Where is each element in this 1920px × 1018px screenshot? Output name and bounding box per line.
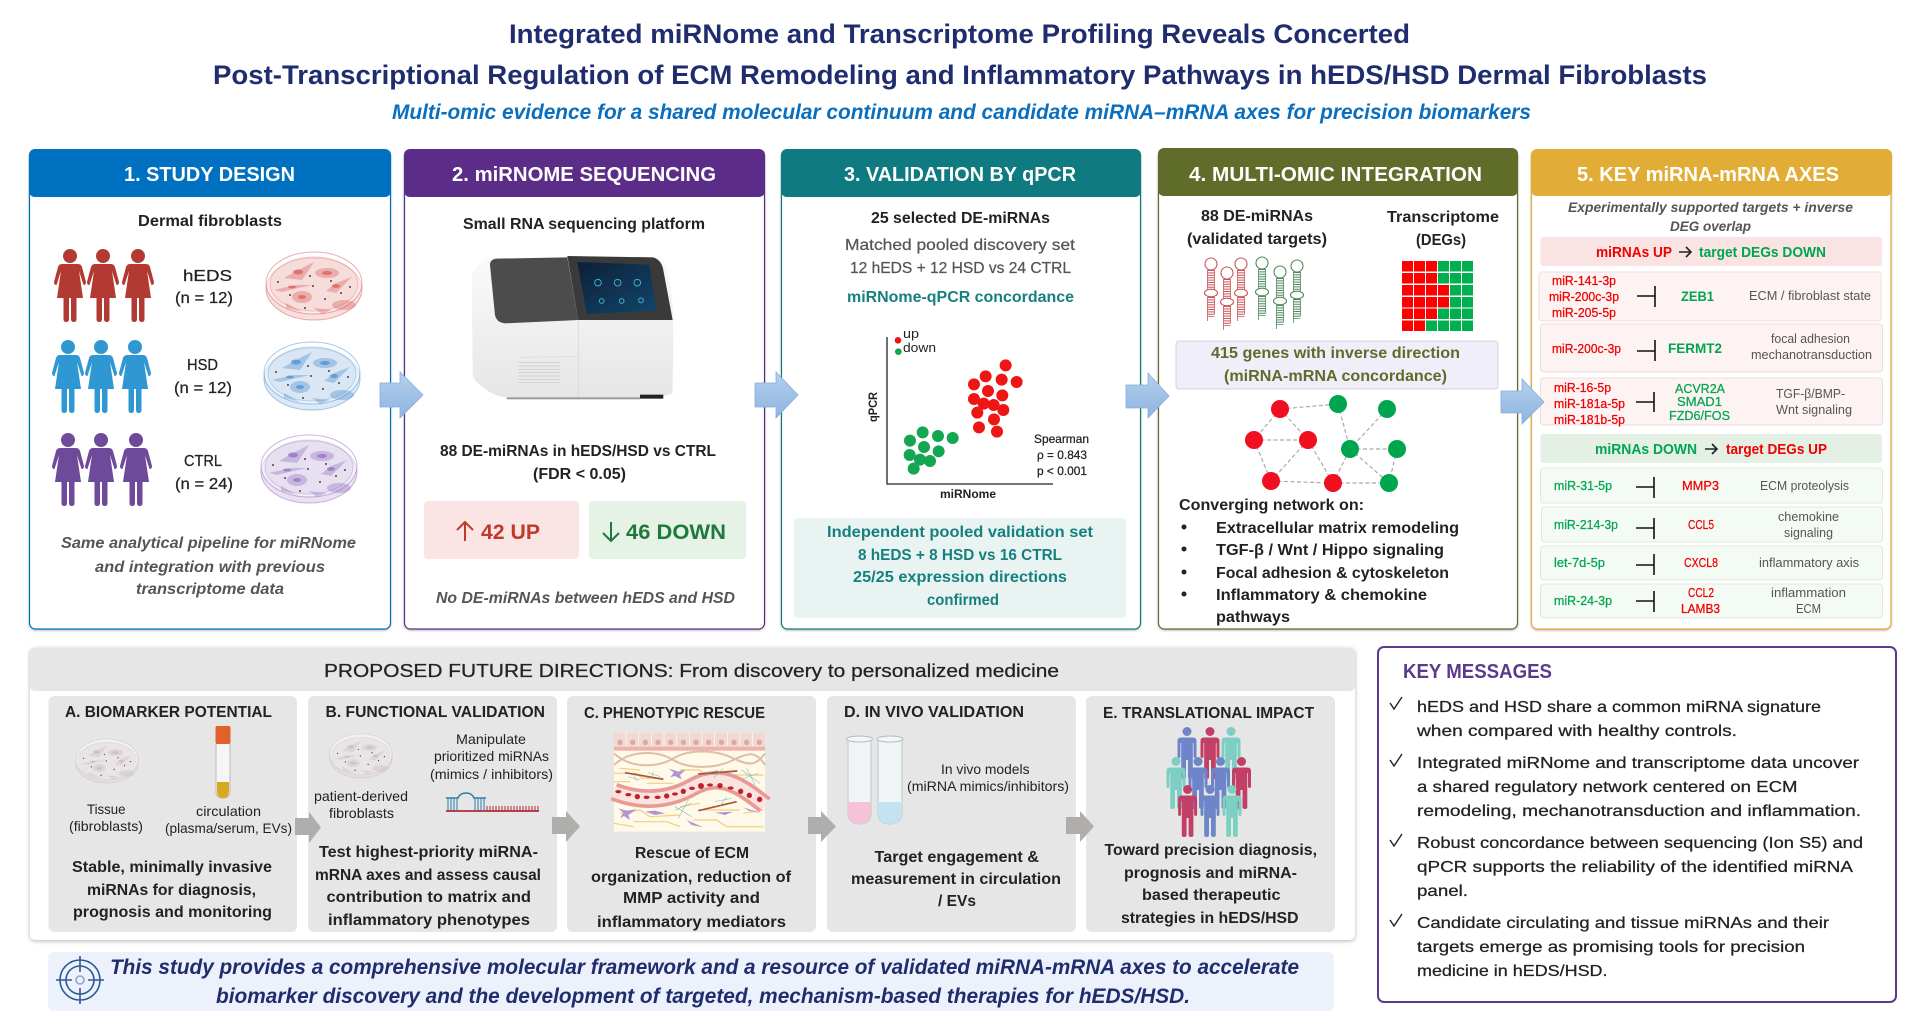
heading: key messages: KEY MESSAGES xyxy=(1403,661,1552,683)
icon: sequencer xyxy=(472,256,673,399)
callout: independent validation: 8 hEDS + 8 HSD vs 16 CTRL xyxy=(858,547,1062,564)
panel: validation by qPCR: 25 selected DE-miRNAs xyxy=(871,210,1050,227)
panel: multi-omic integration xyxy=(1158,148,1518,629)
panel: miRNome sequencing: Small RNA sequencing platform xyxy=(463,216,705,233)
icon: tissue dish xyxy=(76,739,138,783)
panel: multi-omic integration: 4. MULTI-OMIC INTEGRATION xyxy=(1189,164,1482,186)
icon: blood tube xyxy=(216,726,230,798)
icon: fibroblast dish xyxy=(330,734,392,778)
band: miRNAs up: miRNAs UP xyxy=(1596,244,1672,261)
axis: MMP3 xyxy=(1540,468,1882,503)
card: phenotypic rescue: Rescue of ECM xyxy=(635,845,749,862)
callout: 46 down xyxy=(589,501,746,559)
panel: future directions: PROPOSED FUTURE DIRECTIONS: From discovery to personalized medicine xyxy=(324,661,1059,681)
axis: CCL2 LAMB3: CCL2 xyxy=(1688,585,1714,600)
title: Post-Transcriptional Regulation of ECM Remodeling and Inflammatory Pathways in hEDS/HSD Dermal Fibroblasts xyxy=(213,60,1707,90)
card: phenotypic rescue: organization, reduction of xyxy=(591,869,792,886)
card: functional validation: fibroblasts xyxy=(329,805,394,821)
axis: ZEB1: ECM / fibroblast state xyxy=(1749,288,1871,303)
card: functional validation xyxy=(308,696,557,932)
card: functional validation: prioritized miRNAs xyxy=(434,748,549,764)
label: transcriptome: (DEGs) xyxy=(1416,232,1466,249)
icon: hEDS women xyxy=(54,249,154,322)
axis: ZEB1: miR-141-3p xyxy=(1552,273,1616,288)
text: DE-miRNA count xyxy=(440,443,716,483)
panel: key miRNA-mRNA axes: 5. KEY miRNA-mRNA AXES xyxy=(1577,164,1839,186)
panel: study design: Dermal fibroblasts xyxy=(138,213,282,230)
message 1: hEDS and HSD share a common miRNA signature xyxy=(1417,699,1821,716)
panel: validation by qPCR: miRNome-qPCR concordance xyxy=(847,289,1074,306)
icon: miRNA hairpins xyxy=(1204,257,1304,330)
axis: CCL2 LAMB3: miR-24-3p xyxy=(1554,593,1612,608)
message 4: targets emerge as promising tools for precision xyxy=(1417,939,1805,956)
arrow: C to D xyxy=(808,811,836,842)
subtitle: Multi-omic evidence for a shared molecular continuum and candidate miRNA–mRNA axes for precision biomarkers xyxy=(392,101,1531,124)
card: biomarker potential: Stable, minimally invasive xyxy=(72,859,272,876)
list: converging network: Focal adhesion & cytoskeleton xyxy=(1216,565,1449,582)
card: biomarker potential: prognosis and monitoring xyxy=(73,904,272,921)
icon: CTRL women xyxy=(52,433,152,506)
band: miRNAs up xyxy=(1540,237,1882,266)
label: DE-miRNAs xyxy=(1187,208,1327,248)
arrow: validation to integration xyxy=(1126,373,1169,418)
axis: ZEB1 xyxy=(1539,272,1881,321)
arrow: B to C xyxy=(552,811,580,842)
list: converging network xyxy=(1179,497,1459,626)
axis: MMP3: miR-31-5p xyxy=(1554,478,1612,493)
text: DE-miRNA count: 88 DE-miRNAs in hEDS/HSD vs CTRL xyxy=(440,443,716,460)
axis: ZEB1: ZEB1 xyxy=(1681,288,1714,304)
axis: ACVR2A SMAD1 FZD6/FOS: TGF-β/BMP- xyxy=(1776,386,1845,401)
label: hEDS: hEDS xyxy=(183,268,232,285)
axis: CCL2 LAMB3: inflammation xyxy=(1771,585,1846,600)
band: miRNAs down xyxy=(1540,434,1882,463)
title: Integrated miRNome and Transcriptome Profiling Reveals Concerted xyxy=(509,19,1410,49)
axis: ACVR2A SMAD1 FZD6/FOS: ACVR2A xyxy=(1675,381,1725,396)
axis: ACVR2A SMAD1 FZD6/FOS: SMAD1 xyxy=(1677,394,1722,409)
message 1: when compared with healthy controls. xyxy=(1416,723,1737,740)
card: biomarker potential: A. BIOMARKER POTENTIAL xyxy=(65,704,272,721)
axis: FERMT2: mechanotransduction xyxy=(1751,347,1872,362)
label: DE-miRNAs: (validated targets) xyxy=(1187,231,1327,248)
scatter plot xyxy=(866,326,1089,501)
card: biomarker potential xyxy=(48,696,297,932)
card: phenotypic rescue: C. PHENOTYPIC RESCUE xyxy=(584,705,765,722)
card: functional validation: B. FUNCTIONAL VALIDATION xyxy=(326,704,545,721)
band: miRNAs down: miRNAs DOWN xyxy=(1595,441,1697,458)
note: no DE between groups: No DE-miRNAs between hEDS and HSD xyxy=(436,590,735,607)
card: biomarker potential: Tissue xyxy=(87,801,126,817)
axis: FERMT2: focal adhesion xyxy=(1771,331,1850,346)
card: in vivo validation: D. IN VIVO VALIDATION xyxy=(844,704,1024,721)
axis: CCL5: signaling xyxy=(1784,525,1833,540)
axis: CCL2 LAMB3: ECM xyxy=(1796,601,1821,616)
axis: CCL5: miR-214-3p xyxy=(1554,517,1618,532)
note: targets: Experimentally supported targets + inverse xyxy=(1568,199,1853,215)
arrow: D to E xyxy=(1066,811,1094,842)
axis: ACVR2A SMAD1 FZD6/FOS: miR-181a-5p xyxy=(1554,396,1625,411)
card: translational impact: E. TRANSLATIONAL IMPACT xyxy=(1103,705,1314,722)
banner: conclusion: This study provides a comprehensive molecular framework and a resource of validated miRNA-mRNA axes to accelerate xyxy=(110,956,1299,979)
panel: validation by qPCR: 12 hEDS + 12 HSD vs 24 CTRL xyxy=(850,260,1071,277)
note: pipeline: transcriptome data xyxy=(136,581,284,598)
icon: HSD women xyxy=(52,340,151,413)
card: biomarker potential: (plasma/serum, EVs) xyxy=(165,820,292,836)
arrow: sequencing to validation xyxy=(755,372,798,418)
label: HSD: HSD xyxy=(187,357,218,374)
icon: miRNA duplex xyxy=(446,793,539,811)
axis: ZEB1: miR-200c-3p xyxy=(1549,289,1619,304)
callout: independent validation: Independent pooled validation set xyxy=(827,524,1094,541)
card: functional validation: (mimics / inhibitors) xyxy=(430,766,553,782)
heatmap xyxy=(1402,261,1473,331)
icon: HSD dish xyxy=(264,342,360,410)
callout: 415 genes xyxy=(1176,341,1498,389)
axis: CXCL8: inflammatory axis xyxy=(1759,555,1859,570)
message 2 xyxy=(1417,755,1861,820)
label: CTRL: CTRL xyxy=(184,453,222,470)
card: functional validation: Test highest-priority miRNA- xyxy=(319,844,538,861)
note: targets xyxy=(1568,199,1853,234)
label: hEDS xyxy=(175,268,233,307)
axis: FERMT2: miR-200c-3p xyxy=(1552,341,1621,356)
panel: study design: 1. STUDY DESIGN xyxy=(124,164,295,186)
card: phenotypic rescue: MMP activity and xyxy=(623,890,760,907)
icon: check marks xyxy=(1390,697,1402,926)
axis: ZEB1: miR-205-5p xyxy=(1552,305,1616,320)
panel: miRNome sequencing xyxy=(404,149,765,629)
card: in vivo validation xyxy=(827,696,1076,932)
message 1 xyxy=(1416,699,1821,740)
message 4: Candidate circulating and tissue miRNAs and their xyxy=(1417,915,1830,932)
callout: 415 genes: (miRNA-mRNA concordance) xyxy=(1224,368,1447,385)
network diagram xyxy=(1245,395,1406,492)
list: converging network: Inflammatory & chemokine xyxy=(1216,587,1427,604)
card: functional validation: patient-derived xyxy=(314,788,408,804)
icon: test tubes xyxy=(846,736,903,824)
label: DE-miRNAs: 88 DE-miRNAs xyxy=(1201,208,1313,225)
axis: MMP3: ECM proteolysis xyxy=(1760,478,1849,493)
note: targets: DEG overlap xyxy=(1670,218,1751,234)
axis: CCL2 LAMB3: LAMB3 xyxy=(1681,601,1720,616)
card: functional validation: contribution to matrix and xyxy=(326,889,531,906)
panel: validation by qPCR: 3. VALIDATION BY qPCR xyxy=(844,164,1077,186)
message 3: qPCR supports the reliability of the identified miRNA xyxy=(1417,859,1853,876)
scatter plot: Spearman xyxy=(1034,432,1089,446)
message 3: Robust concordance between sequencing (Ion S5) and xyxy=(1417,835,1863,852)
note: pipeline: and integration with previous xyxy=(95,559,325,576)
axis: CXCL8: CXCL8 xyxy=(1684,555,1718,570)
icon: target xyxy=(56,956,104,1004)
banner: conclusion: biomarker discovery and the development of targeted, mechanism-based therapies for hEDS/HSD. xyxy=(216,985,1190,1008)
text: DE-miRNA count: (FDR < 0.05) xyxy=(533,466,626,483)
callout: 42 up: 42 UP xyxy=(481,521,540,544)
band: miRNAs down: target DEGs UP xyxy=(1726,441,1827,458)
message 3: panel. xyxy=(1417,883,1468,900)
card: functional validation: Manipulate xyxy=(456,731,526,747)
axis: CXCL8 xyxy=(1540,546,1882,580)
label: hEDS: (n = 12) xyxy=(175,290,233,307)
title xyxy=(213,19,1707,90)
axis: ACVR2A SMAD1 FZD6/FOS: miR-181b-5p xyxy=(1554,412,1625,427)
card: in vivo validation: Target engagement & xyxy=(874,849,1039,866)
arrow: A to B xyxy=(295,812,321,843)
scatter plot: p < 0.001 xyxy=(1037,464,1087,478)
band: miRNAs up: target DEGs DOWN xyxy=(1699,244,1826,261)
card: translational impact xyxy=(1086,696,1335,932)
arrow: study design to sequencing xyxy=(380,372,423,418)
card: translational impact: Toward precision diagnosis, xyxy=(1104,842,1317,859)
panel: key messages xyxy=(1378,647,1896,1002)
illustration: skin and ECM xyxy=(614,733,765,832)
list: converging network: Converging network on: xyxy=(1179,497,1364,514)
callout: independent validation: confirmed xyxy=(927,592,999,609)
message 4 xyxy=(1417,915,1830,980)
card: functional validation: mRNA axes and assess causal xyxy=(315,867,541,884)
axis: ACVR2A SMAD1 FZD6/FOS: FZD6/FOS xyxy=(1669,408,1730,423)
card: biomarker potential: (fibroblasts) xyxy=(69,818,143,834)
label: transcriptome: Transcriptome xyxy=(1387,209,1499,226)
message 4: medicine in hEDS/HSD. xyxy=(1417,963,1608,980)
list: converging network: Extracellular matrix remodeling xyxy=(1216,520,1459,537)
axis: CCL5: chemokine xyxy=(1778,509,1839,524)
note: pipeline: Same analytical pipeline for miRNome xyxy=(61,535,356,552)
label: transcriptome xyxy=(1387,209,1499,249)
banner: conclusion xyxy=(48,952,1334,1011)
axis: ACVR2A SMAD1 FZD6/FOS xyxy=(1540,378,1882,427)
message 2: a shared regulatory network centered on ECM xyxy=(1417,779,1798,796)
label: HSD xyxy=(174,357,232,397)
card: translational impact: based therapeutic xyxy=(1142,887,1281,904)
axis: FERMT2: FERMT2 xyxy=(1668,340,1722,356)
icon: patient group xyxy=(1166,727,1251,837)
axis: ACVR2A SMAD1 FZD6/FOS: Wnt signaling xyxy=(1776,402,1852,417)
axis: CCL5 xyxy=(1542,507,1882,542)
axis: FERMT2 xyxy=(1540,324,1882,372)
card: in vivo validation: / EVs xyxy=(938,893,976,910)
card: phenotypic rescue xyxy=(567,696,816,932)
card: translational impact: strategies in hEDS/HSD xyxy=(1121,910,1298,927)
scatter plot: miRNome xyxy=(940,487,996,501)
callout: 415 genes: 415 genes with inverse direction xyxy=(1211,345,1460,362)
label: HSD: (n = 12) xyxy=(174,380,232,397)
card: in vivo validation: measurement in circulation xyxy=(851,871,1061,888)
scatter plot: up xyxy=(903,326,919,341)
card: functional validation: inflammatory phenotypes xyxy=(328,912,530,929)
arrow: integration to axes xyxy=(1501,379,1544,424)
message 3 xyxy=(1417,835,1863,900)
card: phenotypic rescue: inflammatory mediators xyxy=(597,914,786,931)
panel: study design xyxy=(29,149,391,629)
axis: CXCL8: let-7d-5p xyxy=(1554,555,1605,570)
axis: ACVR2A SMAD1 FZD6/FOS: miR-16-5p xyxy=(1554,380,1611,395)
card: biomarker potential: circulation xyxy=(196,803,261,819)
note: pipeline xyxy=(61,535,356,598)
panel: validation by qPCR xyxy=(781,149,1141,629)
panel: future directions xyxy=(30,648,1355,940)
label: CTRL xyxy=(175,453,233,493)
icon: CTRL dish xyxy=(261,435,357,503)
panel: miRNome sequencing: 2. miRNOME SEQUENCING xyxy=(452,164,716,186)
callout: independent validation xyxy=(794,518,1126,618)
panel: key miRNA-mRNA axes xyxy=(1531,149,1892,629)
card: biomarker potential: miRNAs for diagnosis, xyxy=(87,882,256,899)
message 2: remodeling, mechanotransduction and inflammation. xyxy=(1417,803,1861,820)
callout: independent validation: 25/25 expression directions xyxy=(853,569,1067,586)
scatter plot: down xyxy=(903,340,936,355)
card: translational impact: prognosis and miRNA- xyxy=(1124,865,1297,882)
label: CTRL: (n = 24) xyxy=(175,476,233,493)
callout: 46 down: 46 DOWN xyxy=(626,521,726,544)
card: in vivo validation: (miRNA mimics/inhibitors) xyxy=(907,778,1069,794)
message 2: Integrated miRNome and transcriptome data uncover xyxy=(1417,755,1860,772)
scatter plot: ρ = 0.843 xyxy=(1037,448,1087,462)
icon: hEDS dish xyxy=(266,252,362,320)
card: in vivo validation: In vivo models xyxy=(941,761,1030,777)
axis: CCL5: CCL5 xyxy=(1688,517,1714,532)
callout: 42 up xyxy=(424,501,579,559)
list: converging network: TGF-β / Wnt / Hippo signaling xyxy=(1216,542,1444,559)
panel: validation by qPCR: Matched pooled discovery set xyxy=(845,237,1076,254)
axis: MMP3: MMP3 xyxy=(1682,478,1719,493)
scatter plot: qPCR xyxy=(866,392,880,422)
axis: CCL2 LAMB3 xyxy=(1540,584,1882,618)
list: converging network: pathways xyxy=(1216,609,1290,626)
